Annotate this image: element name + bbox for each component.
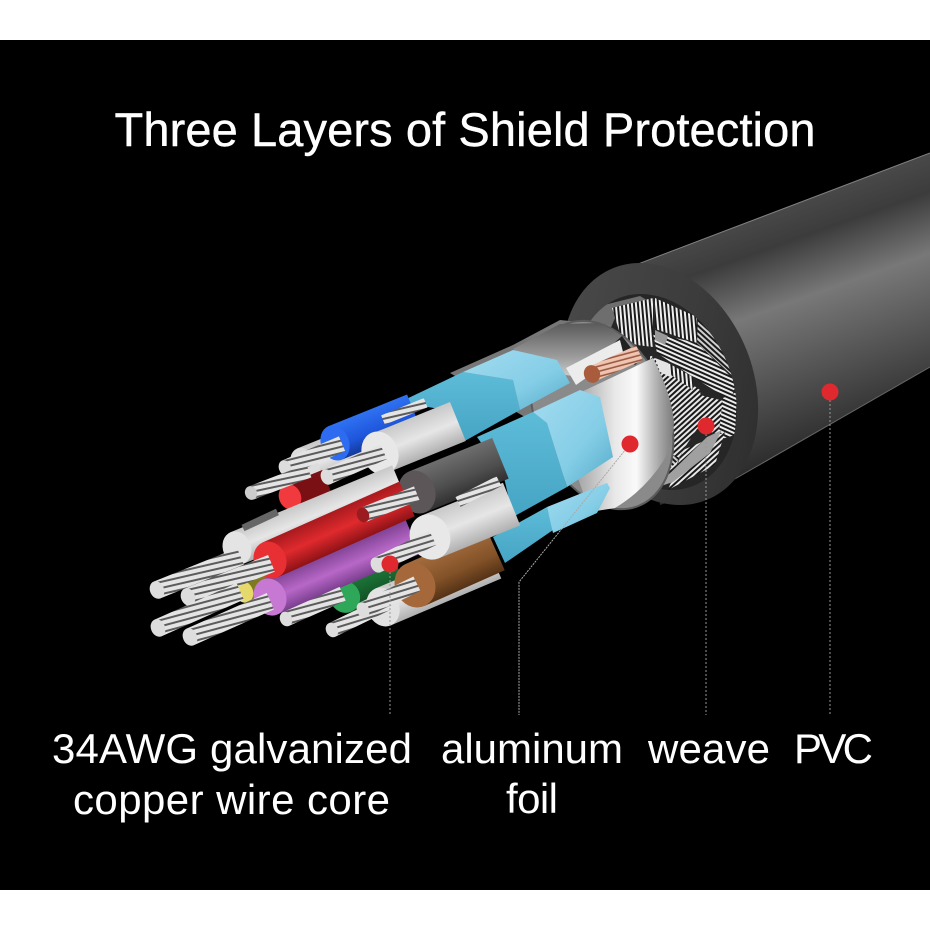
label: PVC: PVC [794,725,873,772]
label: 34AWG galvanized copper wire core: copper wire core [73,776,390,823]
strand 3 [148,583,244,639]
label: aluminum foil: foil [506,775,558,822]
strand 12 [243,464,311,502]
wire: white upper [355,401,466,480]
wire: red small [275,470,332,513]
wire: white lower small [360,542,501,632]
strand 1 [147,548,244,601]
weave shield [591,294,737,490]
wire: white small [284,426,368,493]
strand 6 [323,595,393,639]
label: aluminum foil [441,725,623,822]
wire: purple [248,519,420,621]
wire: yellow [232,571,276,606]
strand 2 [178,555,275,608]
strand 4 [180,593,274,648]
strand 7 [354,577,420,620]
leader: aluminum foil [519,436,638,715]
bare strands [147,398,501,648]
label: 34AWG galvanized copper wire core: 34AWG galvanized [52,725,412,772]
title: Three Layers of Shield Protection [114,103,816,156]
leader: weave [698,418,714,715]
strand 9 [355,486,420,524]
strand 11 [276,436,345,478]
label: 34AWG galvanized copper wire core [52,725,412,823]
wire: long white [218,465,405,569]
label: aluminum foil: aluminum [441,725,623,772]
wire: brown [387,528,505,614]
wire: white centre [403,483,520,566]
leader: copper wire core [382,556,398,715]
strand 13 [242,509,279,531]
strand 8 [368,531,436,575]
wire: blue [315,394,421,465]
wire: red large [248,482,415,584]
label: weave: weave [647,725,770,772]
leader: PVC [822,384,838,715]
PVC jacket [527,153,930,535]
strand 15 [456,476,501,507]
aluminum foil sleeve [450,299,700,531]
strand 5 [277,587,346,628]
copper drain wire [581,345,643,385]
wire: green [325,560,407,617]
strand 10 [318,444,387,487]
teal foil wraps [400,350,613,563]
strand 14 [381,398,428,425]
wire: dark grey [392,438,509,519]
cable illustration [147,153,930,648]
